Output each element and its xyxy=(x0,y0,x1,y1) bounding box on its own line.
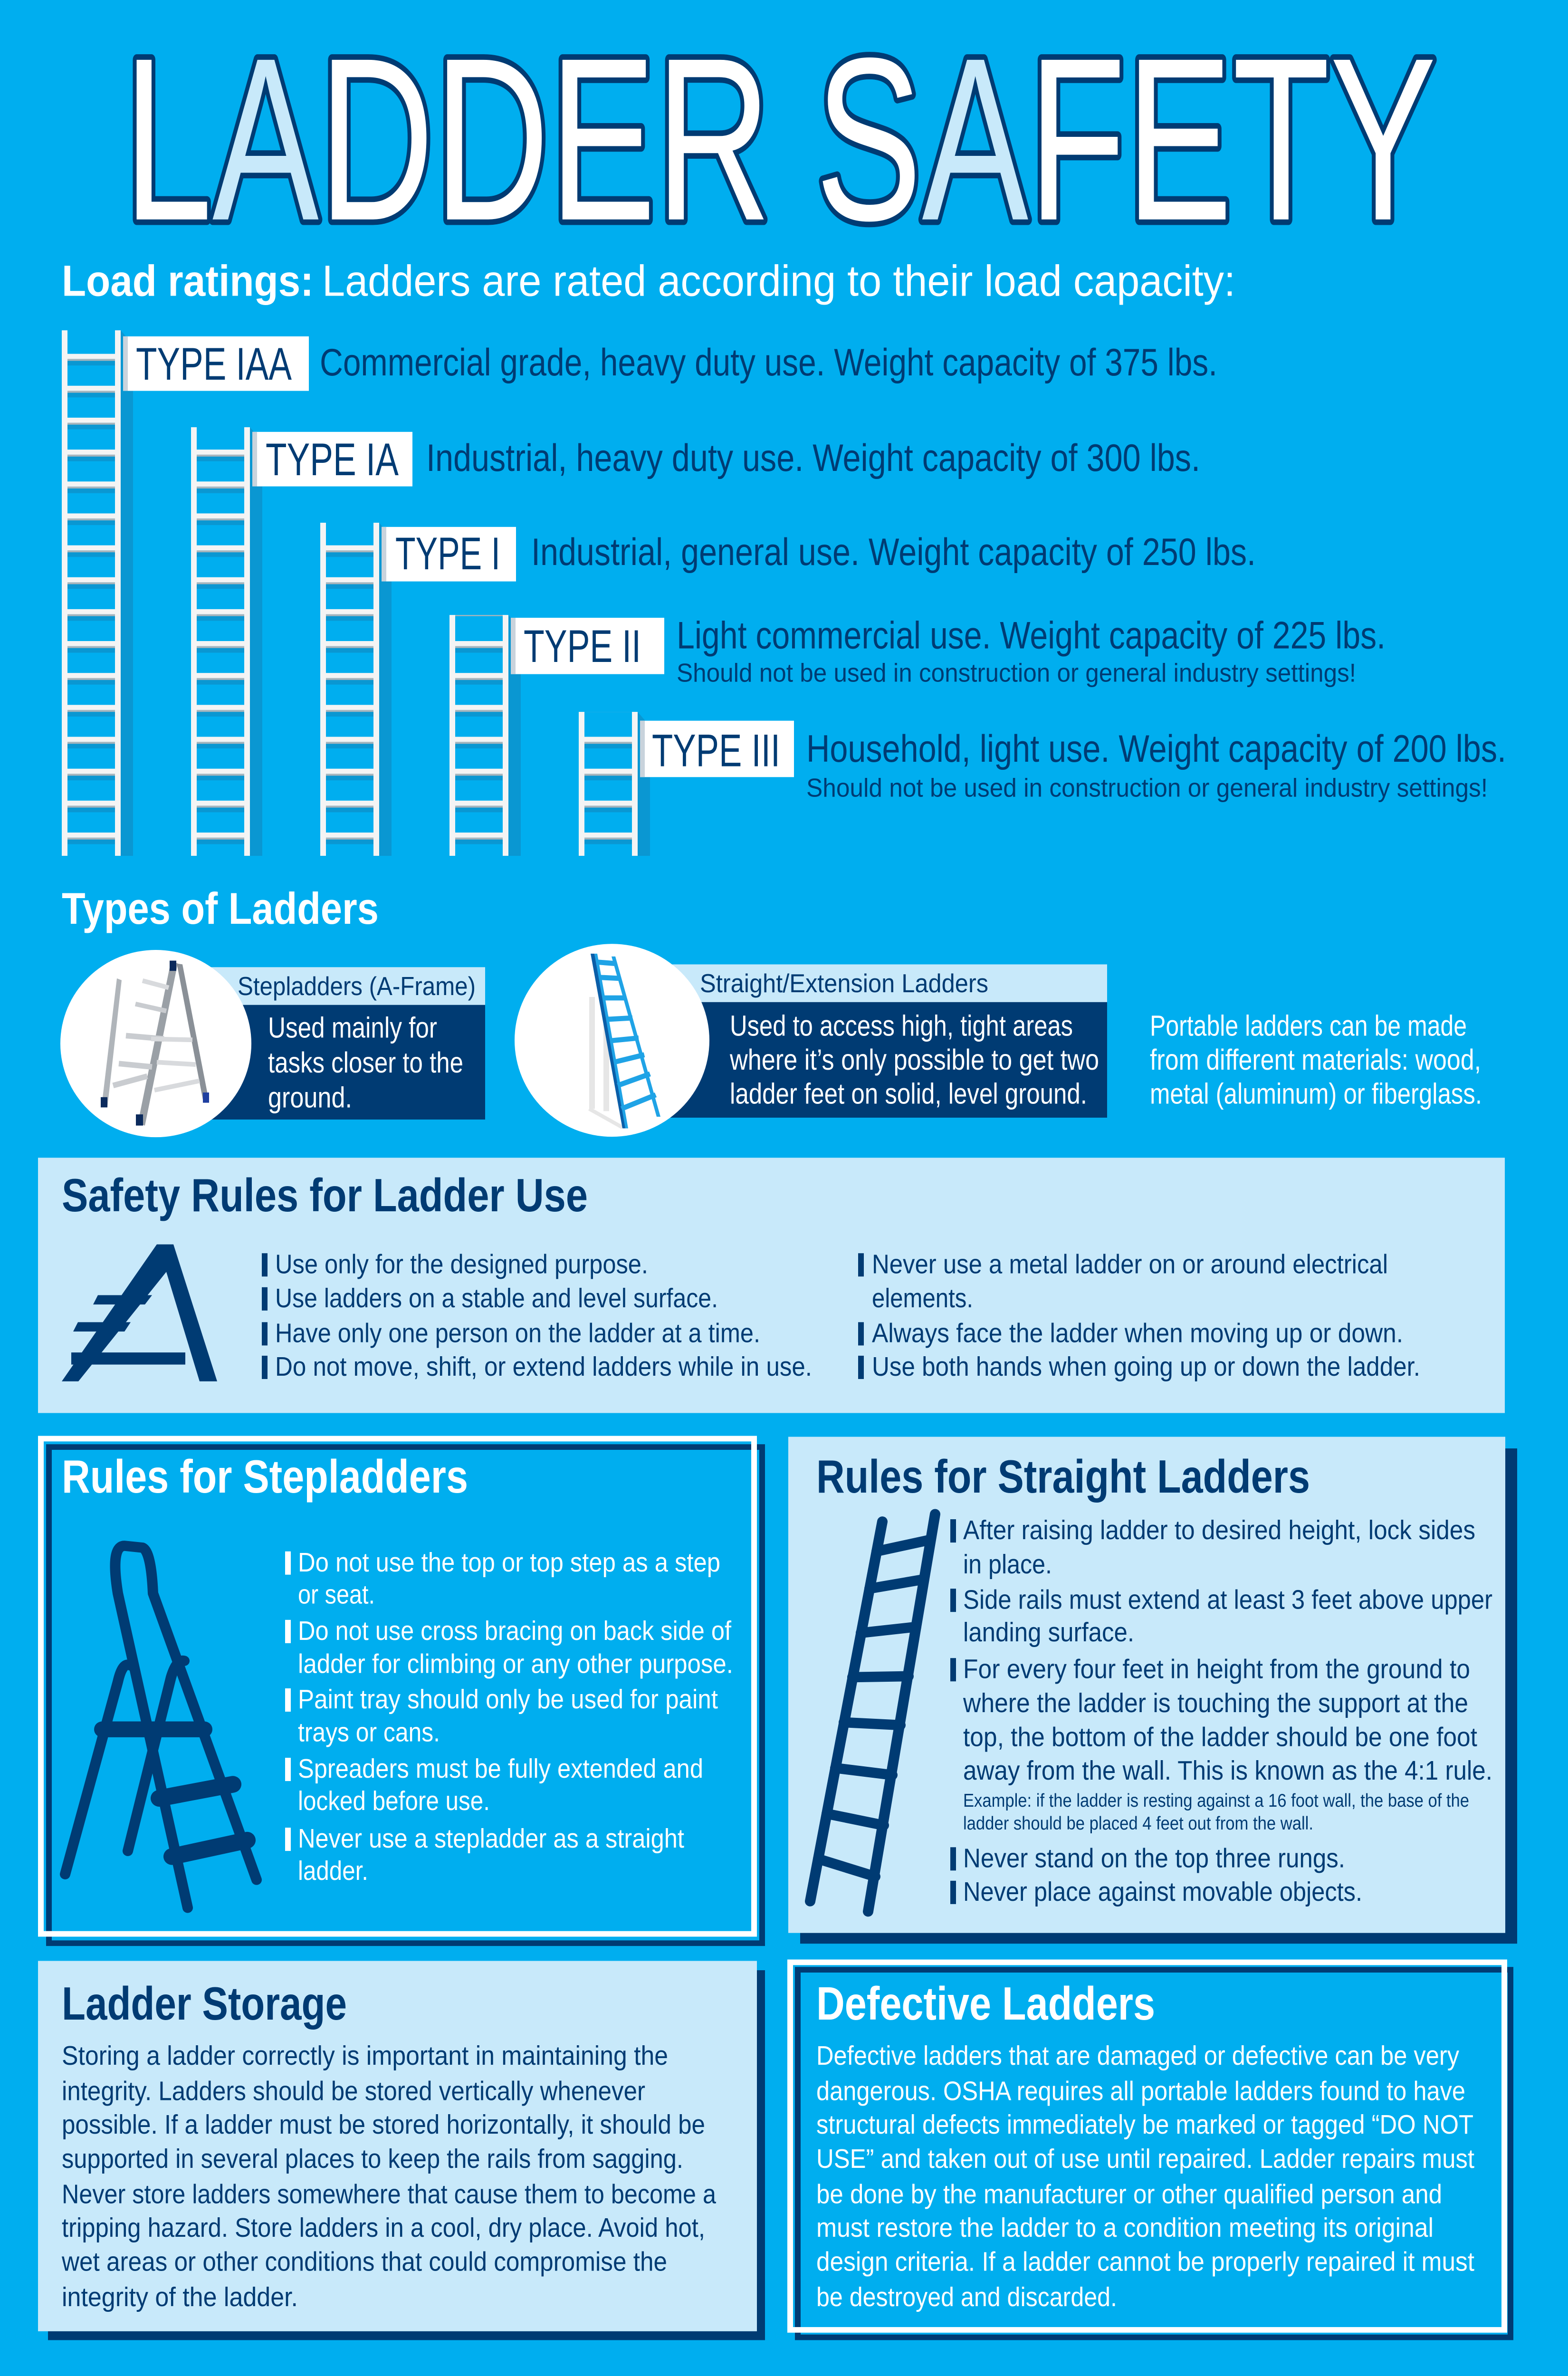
list: straight ladder rules: in place. xyxy=(963,1549,1052,1580)
list: general rules left: Use only for the designed purpose. xyxy=(275,1249,648,1279)
list: straight ladder rules: away from the wall. This is known as the 4:1 rule. xyxy=(963,1756,1492,1786)
panel: rules for straight ladders xyxy=(788,1437,1517,1944)
text: defective body: Defective ladders that are damaged or defective can be very xyxy=(816,2041,1459,2071)
text: storage body: integrity of the ladder. xyxy=(62,2282,298,2312)
card: stepladders: Used mainly for xyxy=(268,1012,437,1044)
card: straight/extension ladders: ladder feet on solid, level ground. xyxy=(730,1078,1087,1110)
heading: rules for stepladders: Rules for Stepladders xyxy=(62,1450,468,1503)
icon: straight ladder xyxy=(810,1514,935,1912)
description: type II: Should not be used in construction or general industry settings! xyxy=(677,658,1356,687)
ladder chart: load ratings xyxy=(62,330,1506,856)
heading: defective ladders: Defective Ladders xyxy=(816,1977,1155,2030)
list: straight ladder rules: Side rails must extend at least 3 feet above upper xyxy=(963,1585,1492,1615)
card: stepladders: tasks closer to the xyxy=(268,1046,463,1079)
panel: safety rules for ladder use xyxy=(38,1158,1505,1413)
list: straight ladder rules: Never stand on the top three rungs. xyxy=(963,1843,1345,1873)
list: general rules right xyxy=(858,1249,1420,1382)
panel: ladder storage xyxy=(38,1961,765,2340)
label: type IA: TYPE IA xyxy=(266,434,399,485)
ladder: type II xyxy=(449,615,521,856)
label: type III: TYPE III xyxy=(652,725,780,776)
heading: rules for straight ladders: Rules for Straight Ladders xyxy=(816,1450,1310,1503)
list: general rules left: Use ladders on a stable and level surface. xyxy=(275,1283,718,1313)
text: defective body: must restore the ladder to a condition meeting its original xyxy=(816,2213,1434,2243)
list: stepladder rules: or seat. xyxy=(298,1580,375,1610)
icon: A-frame ladder xyxy=(62,1245,217,1381)
list: stepladder rules: Do not use the top or top step as a step xyxy=(298,1547,720,1578)
icon: stepladder in circle xyxy=(60,950,251,1137)
list: straight ladder rules: Example: if the ladder is resting against a 16 foot wall, the base of the xyxy=(963,1790,1469,1811)
icon: stepladder xyxy=(65,1546,257,1908)
load ratings heading: Load ratings: xyxy=(62,256,314,305)
list: stepladder rules: Spreaders must be fully extended and xyxy=(298,1754,703,1784)
label: type I: TYPE I xyxy=(395,528,500,579)
text: defective body: USE” and taken out of use until repaired. Ladder repairs must xyxy=(816,2144,1474,2174)
text: defective body: structural defects immediately be marked or tagged “DO NOT xyxy=(816,2110,1473,2140)
heading: types of ladders: Types of Ladders xyxy=(62,884,379,934)
list: stepladder rules xyxy=(285,1547,733,1886)
list: stepladder rules: ladder for climbing or any other purpose. xyxy=(298,1649,733,1679)
panel: defective ladders xyxy=(790,1962,1511,2338)
list: general rules left: Do not move, shift, or extend ladders while in use. xyxy=(275,1352,812,1382)
description: type IA: Industrial, heavy duty use. Weight capacity of 300 lbs. xyxy=(426,437,1200,479)
text: storage body: possible. If a ladder must be stored horizontally, it should be xyxy=(62,2110,705,2140)
ladder: type IA xyxy=(191,427,262,856)
description: type IAA: Commercial grade, heavy duty use. Weight capacity of 375 lbs. xyxy=(320,341,1217,384)
list: stepladder rules: Paint tray should only be used for paint xyxy=(298,1685,718,1715)
text: defective body xyxy=(816,2041,1474,2312)
ladder: type III xyxy=(579,712,650,856)
heading: safety rules: Safety Rules for Ladder Use xyxy=(62,1169,588,1221)
list: stepladder rules: trays or cans. xyxy=(298,1717,440,1748)
list: straight ladder rules: For every four feet in height from the ground to xyxy=(963,1654,1470,1684)
icon: straight ladder in circle xyxy=(515,944,709,1137)
list: straight ladder rules: Never place against movable objects. xyxy=(963,1877,1362,1907)
list: general rules right: Never use a metal ladder on or around electrical xyxy=(872,1249,1388,1279)
list: straight ladder rules: top, the bottom of the ladder should be one foot xyxy=(963,1722,1477,1752)
text: materials note xyxy=(1150,1010,1482,1110)
list: straight ladder rules: where the ladder is touching the support at the xyxy=(963,1688,1468,1718)
heading: ladder storage: Ladder Storage xyxy=(62,1977,347,2030)
label: type II: TYPE II xyxy=(524,621,641,672)
description: type III: Should not be used in construction or general industry settings! xyxy=(806,773,1488,802)
ladder: type IAA xyxy=(62,330,133,856)
text: materials note: Portable ladders can be made xyxy=(1150,1010,1467,1042)
card: straight/extension ladders: Used to access high, tight areas xyxy=(730,1010,1073,1042)
text: defective body: design criteria. If a ladder cannot be properly repaired it must xyxy=(816,2247,1474,2277)
list: straight ladder rules: ladder should be placed 4 feet out from the wall. xyxy=(963,1813,1313,1834)
text: defective body: be destroyed and discarded. xyxy=(816,2282,1117,2312)
list: general rules right: Always face the ladder when moving up or down. xyxy=(872,1318,1403,1348)
load ratings heading: Ladders are rated according to their load capacity: xyxy=(322,256,1235,305)
list: stepladder rules: Do not use cross bracing on back side of xyxy=(298,1616,732,1646)
list: stepladder rules: Never use a stepladder as a straight xyxy=(298,1824,684,1854)
list: straight ladder rules: landing surface. xyxy=(963,1617,1134,1648)
card: stepladders: Stepladders (A-Frame) xyxy=(238,972,476,1001)
text: defective body: be done by the manufacturer or other qualified person and xyxy=(816,2179,1442,2209)
card: straight/extension ladders: where it’s only possible to get two xyxy=(729,1044,1099,1076)
label: type IAA: TYPE IAA xyxy=(136,338,292,390)
list: stepladder rules: ladder. xyxy=(298,1856,368,1886)
list: general rules left: Have only one person on the ladder at a time. xyxy=(275,1318,760,1348)
text: storage body: supported in several places to keep the rails from sagging. xyxy=(62,2144,683,2174)
card: stepladders xyxy=(60,950,485,1137)
description: type II: Light commercial use. Weight capacity of 225 lbs. xyxy=(677,614,1386,657)
text: materials note: from different materials: wood, xyxy=(1150,1044,1481,1076)
card: straight/extension ladders: Straight/Extension Ladders xyxy=(700,969,988,998)
text: storage body: wet areas or other conditions that could compromise the xyxy=(61,2247,667,2277)
text: materials note: metal (aluminum) or fiberglass. xyxy=(1150,1078,1482,1110)
description: type I: Industrial, general use. Weight capacity of 250 lbs. xyxy=(531,531,1256,574)
ladder: type I xyxy=(320,523,392,856)
text: defective body: dangerous. OSHA requires all portable ladders found to have xyxy=(816,2076,1465,2106)
card: straight/extension ladders xyxy=(515,944,1107,1137)
text: storage body: Storing a ladder correctly is important in maintaining the xyxy=(62,2041,668,2071)
list: straight ladder rules: After raising ladder to desired height, lock sides xyxy=(963,1515,1475,1545)
list: general rules right: elements. xyxy=(872,1283,973,1313)
text: storage body xyxy=(61,2041,716,2312)
text: storage body: integrity. Ladders should be stored vertically whenever xyxy=(62,2076,645,2106)
text: storage body: Never store ladders somewhere that cause them to become a xyxy=(62,2179,716,2209)
list: general rules left xyxy=(262,1249,812,1382)
list: straight ladder rules xyxy=(950,1515,1492,1907)
panel: rules for stepladders xyxy=(41,1438,762,1943)
description: type II xyxy=(677,614,1386,687)
list: stepladder rules: locked before use. xyxy=(298,1786,490,1816)
description: type III xyxy=(806,728,1506,802)
text: storage body: tripping hazard. Store ladders in a cool, dry place. Avoid hot, xyxy=(62,2213,705,2243)
card: stepladders: ground. xyxy=(268,1082,352,1114)
list: general rules right: Use both hands when going up or down the ladder. xyxy=(872,1352,1420,1382)
